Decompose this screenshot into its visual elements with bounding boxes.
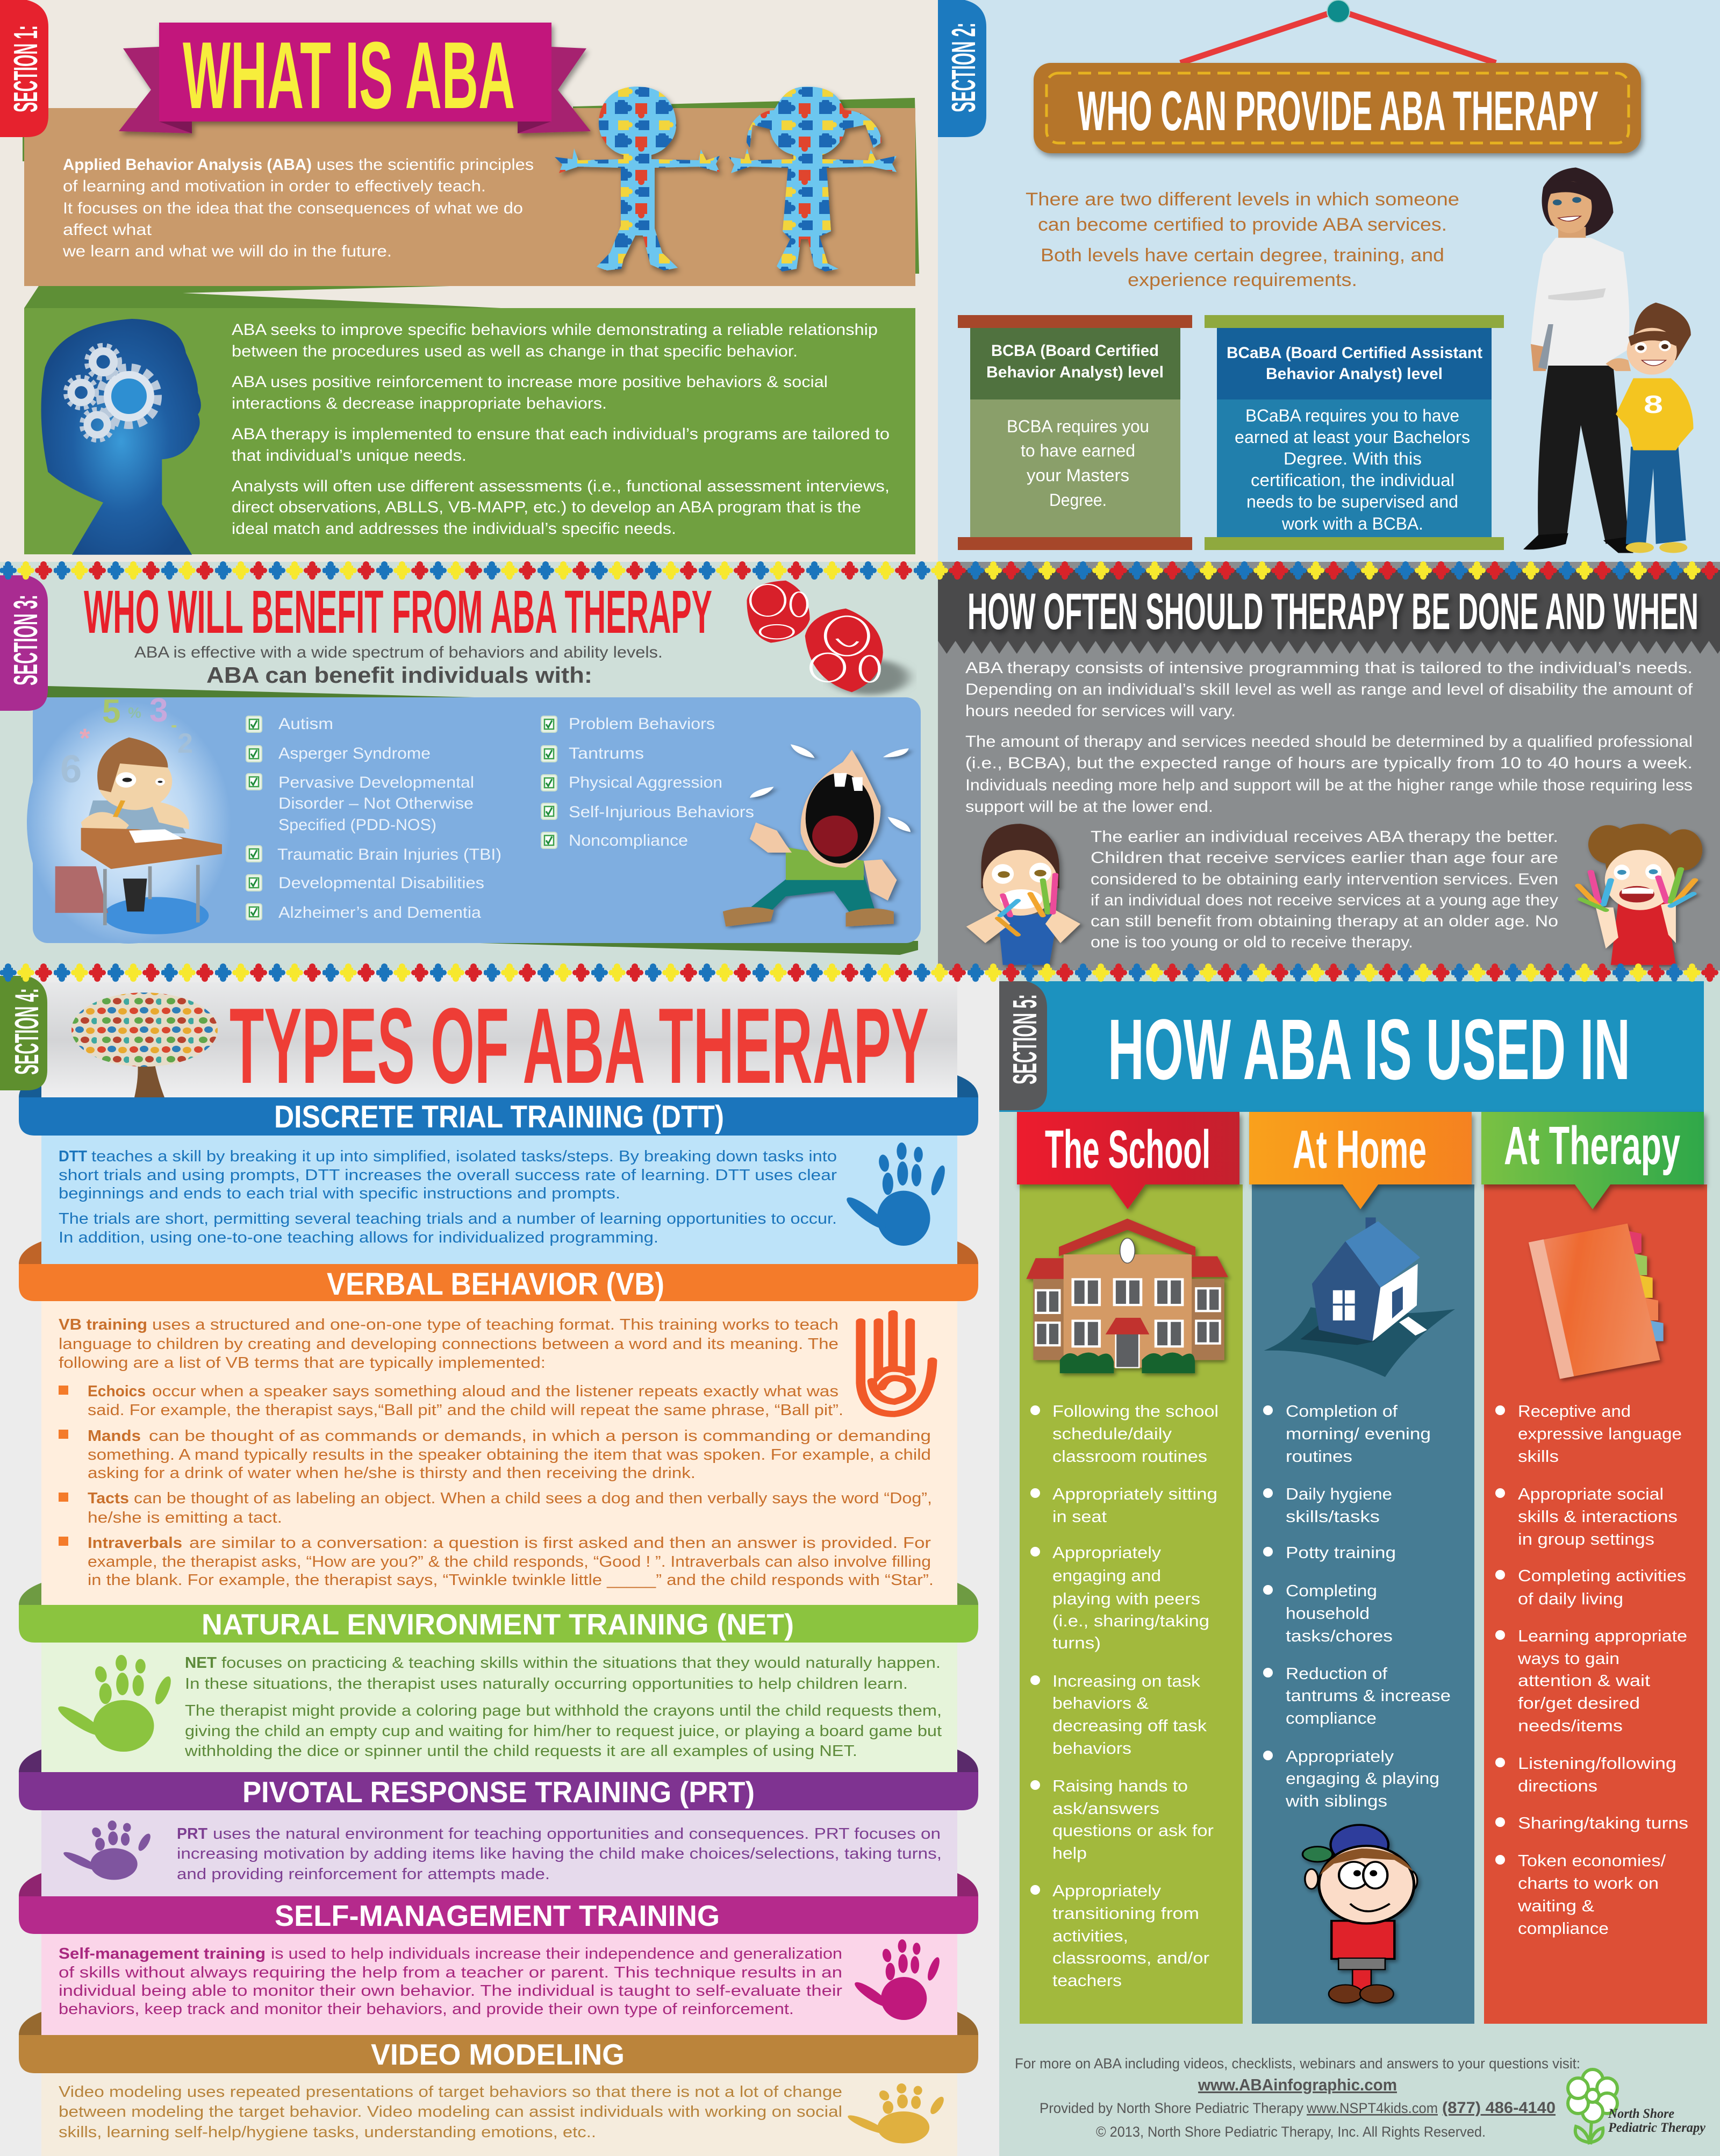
footer credits: (877) 486-4140 bbox=[1442, 2099, 1556, 2117]
intro text: Both levels have certain degree, training, and bbox=[1041, 245, 1444, 266]
ribbon heading: self-management: SELF-MANAGEMENT TRAINING bbox=[275, 1899, 720, 1932]
icon: spiral hand bbox=[861, 1313, 933, 1414]
ribbon heading: DTT bbox=[19, 1075, 978, 1136]
list: school goals: schedule/daily bbox=[1052, 1424, 1172, 1443]
video modeling text: skills, learning self-help/hygiene tasks, understanding emotions, etc.. bbox=[59, 2124, 596, 2141]
footer credits bbox=[1015, 2055, 1580, 2140]
self-management text: is used to help individuals increase their independence and generalization bbox=[271, 1945, 842, 1962]
icon: puzzle boy and girl bbox=[555, 87, 897, 272]
VB text: can be thought of as labeling an object. When a child sees a dog and then verbally says the word “Dog”, bbox=[134, 1490, 932, 1507]
panel: discrete trial training bbox=[19, 1075, 978, 1264]
list: therapy goals: Receptive and bbox=[1518, 1402, 1631, 1420]
body text: (i.e., BCBA), but the expected range of hours are typically from 10 to 40 hours a week. bbox=[965, 754, 1693, 772]
VB text: something. A mand typically results in the speaker obtaining the item that was spoken. For example, a child bbox=[88, 1446, 931, 1463]
video modeling text bbox=[59, 2083, 842, 2141]
icon: head with gears bbox=[41, 319, 201, 555]
title band bbox=[41, 982, 957, 1106]
icon: yellow hand print bbox=[844, 2083, 947, 2144]
panel: BCaBA: work with a BCBA. bbox=[1281, 514, 1423, 533]
VB text: said. For example, the therapist says,“Ball pit” and the child will repeat the same phrase, “Ball pit”. bbox=[88, 1402, 843, 1419]
VB text: Mands bbox=[88, 1427, 141, 1445]
list: therapy goals: directions bbox=[1518, 1776, 1597, 1795]
checklist: left column: Developmental Disabilities bbox=[278, 874, 484, 892]
ribbon heading: VB bbox=[19, 1241, 978, 1302]
PRT text: increasing motivation by adding items like having the child make choices/selections, taking turns, bbox=[177, 1845, 942, 1862]
column: at home bbox=[1249, 1112, 1474, 2024]
illustration: frustrated student: 5 bbox=[102, 693, 120, 730]
PRT text: PRT bbox=[177, 1825, 207, 1843]
NET text: NET bbox=[185, 1654, 217, 1672]
icon: house bbox=[1264, 1217, 1455, 1377]
checklist: left column bbox=[246, 715, 501, 922]
footer credits: Provided by North Shore Pediatric Therapy bbox=[1040, 2100, 1303, 2116]
panel: BCaBA bbox=[1205, 315, 1504, 550]
details text bbox=[232, 321, 890, 538]
list: school goals: Raising hands to bbox=[1052, 1776, 1188, 1795]
body text: The amount of therapy and services needed should be determined by a qualified professional bbox=[965, 733, 1693, 751]
PRT text: and providing reinforcement for attempts made. bbox=[177, 1866, 550, 1883]
list: home goals: with siblings bbox=[1285, 1791, 1387, 1810]
list: home goals: Daily hygiene bbox=[1286, 1484, 1392, 1503]
DTT text: short trials and using prompts, DTT increases the overall success rate of learning. DTT uses clear bbox=[59, 1167, 837, 1184]
NET text: withholding the dice or spinner until the child requests it are all examples of using NET. bbox=[184, 1743, 857, 1760]
divider: puzzle strip bottom bbox=[0, 963, 1720, 982]
body text: Depending on an individual’s skill level as well as range and level of disability the amount of bbox=[965, 681, 1693, 698]
early intervention text: considered to be obtaining early intervention services. Even bbox=[1091, 870, 1558, 888]
section 2: who can provide ABA therapy bbox=[938, 0, 1720, 562]
details text: that individual’s unique needs. bbox=[232, 447, 467, 465]
panel: BCBA: your Masters bbox=[1027, 466, 1129, 485]
icon: tabbed binder bbox=[1529, 1224, 1664, 1379]
list: home goals: morning/ evening bbox=[1286, 1424, 1431, 1443]
ribbon heading: DTT: DISCRETE TRIAL TRAINING (DTT) bbox=[274, 1100, 724, 1134]
checklist: right column: Tantrums bbox=[569, 745, 644, 762]
checklist: left column: Asperger Syndrome bbox=[278, 745, 431, 762]
icon: green hand print bbox=[54, 1655, 174, 1752]
video modeling text: between modeling the target behavior. Video modeling can assist individuals with working on social bbox=[59, 2103, 842, 2121]
ribbon heading: NET bbox=[19, 1583, 978, 1643]
list: therapy goals: skills & interactions bbox=[1518, 1507, 1678, 1526]
illustration: girl with painted hands bbox=[1578, 824, 1702, 965]
VB text: following are a list of VB terms that are typically implemented: bbox=[59, 1354, 546, 1372]
checklist: left column: Pervasive Developmental bbox=[278, 774, 474, 791]
panel: BCaBA: BCaBA requires you to have bbox=[1245, 406, 1459, 425]
self-management text: behaviors, keep track and monitor their behaviors, and provide their own type of reinforcement. bbox=[59, 2001, 794, 2018]
intro text: There are two different levels in which someone bbox=[1026, 189, 1459, 210]
list: school goals: classroom routines bbox=[1052, 1447, 1207, 1466]
illustration: frustrated student: 2 bbox=[177, 728, 193, 759]
details text: Analysts will often use different assessments (i.e., functional assessment interviews, bbox=[232, 477, 890, 495]
section: how often should therapy be done bbox=[938, 562, 1720, 970]
tab: section 1 bbox=[0, 0, 48, 137]
checklist: right column bbox=[541, 715, 754, 849]
panel: BCBA bbox=[958, 315, 1192, 550]
list: home goals: tasks/chores bbox=[1286, 1626, 1393, 1645]
list: therapy goals: Token economies/ bbox=[1518, 1851, 1666, 1870]
ribbon heading: video modeling: VIDEO MODELING bbox=[371, 2038, 625, 2071]
checklist: left column: Specified (PDD-NOS) bbox=[278, 816, 436, 834]
list: school goals: decreasing off task bbox=[1052, 1716, 1207, 1735]
intro text bbox=[62, 156, 534, 260]
list: school goals: Following the school bbox=[1052, 1402, 1219, 1420]
section 1: what is ABA bbox=[0, 0, 938, 562]
illustration: boy with painted hands bbox=[966, 824, 1080, 965]
panel: verbal behavior bbox=[19, 1241, 978, 1605]
list: home goals: Completing bbox=[1286, 1581, 1377, 1600]
list: therapy goals: waiting & bbox=[1517, 1896, 1594, 1915]
list: therapy goals: attention & wait bbox=[1518, 1671, 1650, 1690]
VB text: VB training bbox=[59, 1316, 147, 1333]
body text: hours needed for services will vary. bbox=[965, 702, 1236, 720]
tab: section 3: SECTION 3: bbox=[8, 595, 45, 686]
list: therapy goals: of daily living bbox=[1518, 1589, 1623, 1608]
list: school goals: Appropriately sitting bbox=[1052, 1484, 1217, 1503]
panel: BCBA: BCBA (Board Certified bbox=[991, 342, 1159, 360]
intro text: It focuses on the idea that the consequences of what we do bbox=[63, 199, 523, 217]
VB text: language to children by creating and developing connections between a word and its meaning. The bbox=[59, 1336, 838, 1353]
checklist: right column: Physical Aggression bbox=[569, 774, 722, 791]
icon: school building bbox=[1026, 1218, 1228, 1373]
list: home goals: Completion of bbox=[1286, 1402, 1398, 1420]
early intervention text: if an individual does not receive services at a young age they bbox=[1091, 891, 1558, 909]
list: therapy goals: needs/items bbox=[1518, 1716, 1623, 1735]
illustration: cartoon boy bbox=[1302, 1825, 1417, 2003]
list: therapy goals: for/get desired bbox=[1518, 1694, 1640, 1712]
NET text: focuses on practicing & teaching skills within the situations that they would naturally happen. bbox=[221, 1654, 941, 1672]
panel: video modeling bbox=[19, 2012, 978, 2156]
panel: BCaBA: BCaBA (Board Certified Assistant bbox=[1227, 344, 1482, 362]
details text: interactions & decrease inappropriate behaviors. bbox=[232, 395, 607, 412]
title: WHO WILL BENEFIT FROM ABA THERAPY bbox=[84, 578, 712, 646]
checklist: left column: Disorder – Not Otherwise bbox=[278, 795, 474, 812]
early intervention text: one is too young or old to receive therapy. bbox=[1091, 933, 1413, 951]
illustration: frustrated student: % bbox=[128, 704, 141, 721]
list: therapy goals: in group settings bbox=[1518, 1530, 1654, 1548]
list: therapy goals: skills bbox=[1518, 1447, 1559, 1466]
VB text: he/she is emitting a tact. bbox=[88, 1509, 282, 1526]
list: therapy goals bbox=[1495, 1402, 1688, 1938]
icon: purple hand print bbox=[60, 1821, 153, 1880]
self-management text bbox=[59, 1945, 842, 2018]
icon: hand-print tree bbox=[71, 993, 218, 1097]
body text: support will be at the lower end. bbox=[965, 798, 1213, 816]
DTT text: DTT bbox=[59, 1148, 87, 1165]
list: home goals: tantrums & increase bbox=[1286, 1686, 1451, 1705]
list: school goals bbox=[1030, 1402, 1219, 1990]
checklist: right column: Self-Injurious Behaviors bbox=[569, 803, 754, 821]
details text: between the procedures used as well as change in that specific behavior. bbox=[232, 342, 798, 360]
list: home goals: compliance bbox=[1286, 1709, 1377, 1727]
panel: BCBA: to have earned bbox=[1021, 441, 1135, 460]
list: school goals: (i.e., sharing/taking bbox=[1052, 1611, 1209, 1630]
panel: BCBA: Behavior Analyst) level bbox=[986, 363, 1164, 381]
intro text: experience requirements. bbox=[1128, 270, 1357, 290]
DTT text: teaches a skill by breaking it up into simplified, isolated tasks/steps. By breaking down tasks into bbox=[91, 1148, 837, 1165]
list: therapy goals: expressive language bbox=[1518, 1424, 1682, 1443]
ribbon heading: VB: VERBAL BEHAVIOR (VB) bbox=[327, 1267, 664, 1302]
panel: pivotal response training bbox=[19, 1750, 978, 1896]
list: school goals: activities, bbox=[1052, 1926, 1128, 1945]
title band: TYPES OF ABA THERAPY bbox=[230, 986, 929, 1106]
NET text: In these situations, the therapist uses naturally occurring opportunities to help children learn. bbox=[185, 1675, 908, 1693]
list: school goals: behaviors & bbox=[1052, 1694, 1149, 1712]
panel: natural environment training bbox=[19, 1583, 978, 1772]
list: school goals: Appropriately bbox=[1052, 1881, 1162, 1900]
column header bbox=[1017, 1112, 1239, 1209]
details text: ABA therapy is implemented to ensure that each individual’s programs are tailored to bbox=[232, 425, 890, 443]
panel: BCBA: Degree. bbox=[1049, 490, 1107, 510]
VB text: example, the therapist asks, “How are you?” & the child responds, “Good ! ”. Intraverbals can also involve filling bbox=[88, 1553, 931, 1570]
illustration: frustrated student: 3 bbox=[149, 692, 168, 729]
intro text: affect what bbox=[63, 221, 152, 239]
DTT text bbox=[59, 1148, 837, 1246]
checklist: left column: Alzheimer’s and Dementia bbox=[278, 904, 481, 922]
illustration: therapist and child: 8 bbox=[1644, 390, 1663, 418]
panel: BCaBA: Behavior Analyst) level bbox=[1266, 365, 1443, 383]
VB text: are similar to a conversation: a question is first asked and then an answer is provided. For bbox=[189, 1534, 931, 1552]
list: school goals: Increasing on task bbox=[1052, 1672, 1201, 1690]
list: therapy goals: Learning appropriate bbox=[1518, 1626, 1687, 1645]
illustration: frustrated student: 6 bbox=[60, 748, 82, 791]
VB text bbox=[59, 1316, 934, 1589]
DTT text: In addition, using one-to-one teaching allows for individualized programming. bbox=[59, 1229, 658, 1246]
list: school goals: turns) bbox=[1052, 1633, 1101, 1652]
ribbon heading: self-management bbox=[19, 1873, 978, 1934]
tab: section 4 bbox=[0, 976, 47, 1090]
list: home goals: Reduction of bbox=[1286, 1664, 1387, 1683]
panel: BCaBA: Degree. With this bbox=[1284, 449, 1422, 468]
list: home goals: engaging & playing bbox=[1286, 1769, 1439, 1788]
list: school goals: help bbox=[1052, 1844, 1087, 1862]
list: school goals: playing with peers bbox=[1052, 1589, 1200, 1608]
early intervention text: can still benefit from obtaining therapy at an older age. No bbox=[1091, 912, 1558, 930]
list: home goals: household bbox=[1286, 1604, 1370, 1623]
list: home goals: skills/tasks bbox=[1286, 1507, 1380, 1526]
NET text: giving the child an empty cup and waiting for him/her to request juice, or playing a board game but bbox=[185, 1723, 942, 1740]
VB text: Tacts bbox=[88, 1490, 129, 1507]
panel: BCaBA: needs to be supervised and bbox=[1246, 492, 1458, 511]
list: school goals: classrooms, and/or bbox=[1052, 1948, 1209, 1967]
intro text: Applied Behavior Analysis (ABA) bbox=[63, 156, 312, 174]
intro text: of learning and motivation in order to effectively teach. bbox=[63, 177, 486, 195]
intro text: we learn and what we will do in the future. bbox=[62, 242, 392, 260]
panel: BCaBA: certification, the individual bbox=[1251, 470, 1454, 490]
list: therapy goals: compliance bbox=[1518, 1919, 1609, 1938]
list: home goals: Appropriately bbox=[1286, 1747, 1394, 1766]
heading band bbox=[938, 570, 1720, 654]
list: therapy goals: ways to gain bbox=[1517, 1649, 1619, 1668]
list: home goals bbox=[1263, 1402, 1451, 1810]
PRT text: uses the natural environment for teaching opportunities and consequences. PRT focuses on bbox=[213, 1825, 941, 1843]
early intervention text: Children that receive services earlier than age four are bbox=[1091, 849, 1558, 867]
DTT text: The trials are short, permitting several teaching trials and a number of learning opportunities to occur. bbox=[59, 1210, 837, 1227]
VB text: occur when a speaker says something aloud and the listener repeats exactly what was bbox=[152, 1383, 838, 1400]
list: school goals: Appropriately bbox=[1052, 1543, 1162, 1562]
tab: section 5: SECTION 5: bbox=[1007, 994, 1044, 1084]
list: school goals: transitioning from bbox=[1052, 1904, 1199, 1923]
subtitle bbox=[134, 644, 663, 688]
intro text bbox=[1026, 189, 1459, 290]
footer credits: www.NSPT4kids.com bbox=[1306, 2100, 1438, 2116]
hanging sign bbox=[1034, 0, 1641, 153]
self-management text: of skills without always requiring the help from a teacher or parent. This technique results in an bbox=[59, 1964, 842, 1981]
logo: North Shore Pediatric Therapy flower: North Shore bbox=[1608, 2107, 1674, 2121]
NET text: The therapist might provide a coloring page but withhold the crayons until the child requests them, bbox=[185, 1702, 942, 1719]
NET text bbox=[184, 1654, 942, 1760]
illustration: therapist and child bbox=[1523, 168, 1693, 553]
logo: North Shore Pediatric Therapy flower: Pediatric Therapy bbox=[1608, 2121, 1706, 2135]
subtitle: ABA can benefit individuals with: bbox=[206, 662, 592, 688]
checklist: left column: Traumatic Brain Injuries (TBI) bbox=[277, 846, 501, 863]
VB text: uses a structured and one-on-one type of teaching format. This training works to teach bbox=[152, 1316, 838, 1333]
VB text: Intraverbals bbox=[88, 1534, 182, 1552]
details text: ABA seeks to improve specific behaviors while demonstrating a reliable relationship bbox=[232, 321, 878, 339]
tab: section 3 bbox=[0, 575, 48, 711]
VB text: in the blank. For example, the therapist says, “Twinkle twinkle little _____” and the child responds with “Star”. bbox=[88, 1572, 934, 1589]
column header bbox=[1249, 1112, 1472, 1209]
checklist: right column: Noncompliance bbox=[569, 832, 688, 849]
section 5: how ABA is used in bbox=[999, 970, 1720, 2156]
list: home goals: routines bbox=[1286, 1447, 1352, 1466]
footer credits: For more on ABA including videos, checklists, webinars and answers to your questions visit: bbox=[1015, 2055, 1580, 2072]
illustration: screaming child bbox=[723, 744, 911, 926]
panel: BCBA: BCBA requires you bbox=[1007, 417, 1149, 436]
ribbon heading: video modeling bbox=[19, 2012, 978, 2073]
panel: ABA details bbox=[24, 286, 915, 555]
checklist: right column: Problem Behaviors bbox=[569, 715, 715, 733]
list: school goals: in seat bbox=[1052, 1507, 1107, 1526]
ribbon heading: PRT bbox=[19, 1750, 978, 1810]
illustration: frustrated student: * bbox=[80, 723, 90, 753]
illustration: frustrated student bbox=[27, 692, 231, 944]
early intervention text: The earlier an individual receives ABA therapy the better. bbox=[1091, 828, 1558, 846]
title banner bbox=[119, 22, 591, 133]
icon: blue hand print bbox=[843, 1143, 948, 1246]
VB bullets bbox=[59, 1386, 68, 1546]
tab: section 5 bbox=[999, 981, 1047, 1110]
panel: BCaBA: earned at least your Bachelors bbox=[1235, 427, 1470, 447]
VB text: can be thought of as commands or demands, in which a person is commanding or demanding bbox=[149, 1427, 931, 1445]
title band bbox=[999, 981, 1704, 1112]
divider: puzzle strip top bbox=[0, 561, 1720, 580]
body text: Individuals needing more help and support will be at the higher range while those requiring less bbox=[965, 776, 1693, 794]
column: the school bbox=[1017, 1112, 1243, 2024]
details text: direct observations, ABLLS, VB-MAPP, etc.) to develop an ABA program that is the bbox=[232, 498, 861, 516]
self-management text: individual being able to monitor their own behavior. The individual is taught to self-evaluate their bbox=[59, 1982, 842, 2000]
column header bbox=[1481, 1112, 1704, 1209]
list: school goals: questions or ask for bbox=[1052, 1821, 1214, 1840]
DTT text: beginnings and ends to each trial with specific instructions and prompts. bbox=[59, 1185, 620, 1202]
details text: ideal match and addresses the individual’s specific needs. bbox=[232, 520, 676, 538]
PRT text bbox=[177, 1825, 942, 1883]
list: therapy goals: Appropriate social bbox=[1518, 1484, 1664, 1503]
title banner: WHAT IS ABA bbox=[183, 22, 515, 128]
logo: North Shore Pediatric Therapy flower bbox=[1568, 2069, 1706, 2143]
column header: The School bbox=[1045, 1119, 1210, 1180]
tab: section 2 bbox=[938, 0, 986, 137]
panel: self-management training bbox=[19, 1873, 978, 2035]
list: school goals: behaviors bbox=[1052, 1739, 1131, 1758]
early intervention text bbox=[1091, 828, 1558, 951]
ribbon heading: PRT: PIVOTAL RESPONSE TRAINING (PRT) bbox=[242, 1775, 755, 1809]
list: school goals: ask/answers bbox=[1052, 1799, 1159, 1818]
subtitle: ABA is effective with a wide spectrum of behaviors and ability levels. bbox=[134, 644, 663, 661]
footer credits: www.ABAinfographic.com bbox=[1198, 2075, 1397, 2094]
panel: benefit list bbox=[27, 686, 921, 955]
icon: emotion dice bbox=[747, 581, 909, 695]
column header: At Home bbox=[1293, 1119, 1427, 1180]
tab: section 4: SECTION 4: bbox=[9, 988, 46, 1075]
ribbon heading: NET: NATURAL ENVIRONMENT TRAINING (NET) bbox=[202, 1608, 794, 1641]
body text bbox=[965, 659, 1693, 816]
intro text: uses the scientific principles bbox=[317, 156, 534, 174]
illustration: frustrated student: - bbox=[171, 715, 177, 736]
body text: ABA therapy consists of intensive programming that is tailored to the individual’s needs. bbox=[965, 659, 1693, 677]
checklist: left column: Autism bbox=[278, 715, 333, 733]
footer credits: © 2013, North Shore Pediatric Therapy, Inc. All Rights Reserved. bbox=[1096, 2124, 1486, 2140]
icon: magenta hand print bbox=[851, 1939, 942, 2020]
section 4: types of ABA therapy bbox=[0, 970, 999, 2156]
list: therapy goals: Completing activities bbox=[1518, 1566, 1686, 1585]
list: home goals: Potty training bbox=[1286, 1543, 1396, 1562]
intro text: can become certified to provide ABA services. bbox=[1038, 215, 1447, 235]
column: at therapy bbox=[1481, 1112, 1707, 2024]
self-management text: Self-management training bbox=[59, 1945, 266, 1962]
section 3: who will benefit bbox=[0, 562, 938, 970]
panel: intro bbox=[24, 108, 915, 286]
video modeling text: Video modeling uses repeated presentations of target behaviors so that there is not a lot of change bbox=[59, 2083, 842, 2101]
details text: ABA uses positive reinforcement to increase more positive behaviors & social bbox=[232, 373, 828, 391]
VB text: asking for a drink of water when he/she is thirsty and then receiving the drink. bbox=[88, 1465, 696, 1482]
list: therapy goals: Sharing/taking turns bbox=[1518, 1814, 1688, 1832]
list: therapy goals: charts to work on bbox=[1518, 1874, 1659, 1893]
list: therapy goals: Listening/following bbox=[1518, 1754, 1676, 1773]
list: school goals: engaging and bbox=[1052, 1566, 1161, 1585]
list: school goals: teachers bbox=[1052, 1971, 1122, 1990]
VB text: Echoics bbox=[88, 1383, 146, 1400]
